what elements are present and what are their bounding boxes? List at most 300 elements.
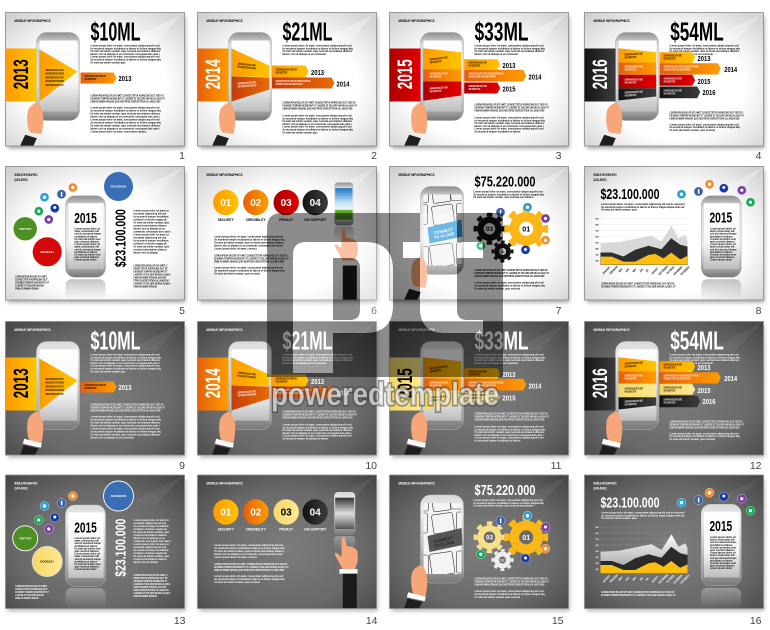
intro text: do eiusmod tempor incididunt ut labore et dolore magna aliq: [90, 368, 161, 370]
left bold text: LABORE ET DOLORE MAGNA: [15, 594, 44, 597]
area chart: 400: [596, 248, 599, 250]
phone text: sed do eiusmod tempo: [710, 541, 737, 544]
panel: slide 7: [390, 166, 570, 317]
body text: Lorem ipsum dolor sit amet, consectetur adipisc: [90, 130, 147, 134]
circle 02 credibility: [243, 499, 268, 532]
funnel segments: AND CONSECTETUR ADIPISCING: [238, 84, 257, 89]
intro text: do eiusmod tempor incididunt ut labore et dolore magna aliq: [90, 356, 161, 359]
right bold text: LABORE ET DOLORE MAGNA ALIQUA: [134, 273, 171, 277]
body text: Lorem ipsum dolor sit amet, consectetur adipiscing elit sed: [474, 282, 544, 284]
bold text: ENIM AD MINIM VENIAM, QUIS NOSTRUD EXERCITATION ULLAMCO NISI: [282, 416, 353, 419]
intro text: Ut enim ad minim veniam, quis: [601, 209, 638, 212]
amount heading: $21ML: [282, 16, 333, 46]
gear 03: 03: [486, 535, 493, 542]
amount heading: $10ML: [90, 326, 141, 356]
intro text: Ut enim ad minim veniam, quis nostrud exercitation ullamco: [282, 50, 353, 53]
arrow 2014: LOREM IPSUM DOLOR SIT AMET AND CONSECTETUR DOLOR: [664, 65, 699, 69]
body text: laboris nisi ut aliquip ex ea commodo consequat duis aute i: [474, 125, 544, 128]
right column text: do eiusmod tempor incididunt: [134, 216, 169, 218]
phone with reflection: [701, 504, 741, 608]
intro text: Ut enim ad minim veniam, quis nostrud exercitation ullamco: [90, 50, 161, 53]
phone text: incididunt ut labore: [74, 545, 98, 548]
slide heading: (DATA-DRIVE): [14, 178, 27, 182]
funnel segments: LOREM IPSUM DOLOR SIT AMET: [624, 78, 643, 82]
arrow 2013: [272, 374, 324, 386]
bold text: LOREM IPSUM DOLOR SIT AMET, CONSECTETUR ADIPISCING ELIT SED DO: [474, 103, 548, 107]
facebook bubble: [104, 481, 134, 511]
phone text: incididunt ut labore: [710, 235, 733, 238]
body text: Ut enim ad minim veniam, quis nostrud exercitation ullamco: [282, 120, 353, 123]
area chart: MAR: [618, 268, 624, 273]
year band: [6, 48, 39, 102]
intro text: Lorem ipsum dolor sit amet, consectetur adipiscing elit sed: [474, 190, 543, 194]
body text: Ut enim ad minim veniam, quis nostrud exercitation ullamco: [90, 422, 161, 424]
twitter bubble: TWITTER: [19, 536, 31, 540]
right column text: ut labore et dolore magna ali: [134, 242, 167, 246]
panel: slide 13: [6, 475, 186, 627]
circle 02 credibility: CREDIBILITY: [246, 528, 267, 532]
social icons: [476, 203, 550, 254]
body text: Ut enim ad minim veniam, quis nostrud exercitation ullamco: [474, 431, 545, 434]
intro text: laboris nisi ut aliquip ex ea commodo consequat duis aute i: [214, 244, 284, 248]
funnel segments: LOREM IPSUM DOLOR SIT AMET: [430, 72, 448, 76]
intro text: Ut enim ad minim veniam, quis nostrud exercitation: [474, 505, 534, 508]
phone text: Lorem ipsum dolor: [74, 259, 97, 262]
right column text: nostrud exercitation ullamco: [134, 224, 167, 228]
area chart: JANUARY: [602, 266, 611, 275]
arrow 2013: AND CONSECTETUR: [468, 64, 480, 68]
bold text: LOREM IPSUM DOLOR SIT AMET, CONSECTETUR ADIPISCING ELIT SED DO: [474, 577, 548, 581]
funnel segments: AND CONSECTETUR ADIPISCING: [238, 393, 257, 398]
right bold text: ENIM AD MINIM VENIAM: [134, 285, 157, 289]
hand holding phone: [212, 102, 235, 146]
intro text: Lorem ipsum dolor sit amet, consectetur adipiscing elit sed: [282, 44, 352, 48]
body text: Lorem ipsum dolor sit amet, consectetur adipiscing elit sed: [90, 106, 160, 110]
arrow 2015: [660, 384, 711, 395]
body text: Ut enim ad minim veniam, quis nostrud exercitation ullamco: [474, 122, 545, 125]
bold text: LOREM IPSUM DOLOR SIT AMET, CONSECTETUR ADIPISCING ELIT SED DO: [90, 94, 164, 98]
area chart: JANUARY: [602, 574, 611, 584]
body text: do eiusmod tempor incididunt ut labore et dolore magna aliq: [282, 426, 353, 429]
phone text: amet consectetur elit: [74, 540, 99, 543]
funnel segments: [232, 48, 269, 102]
intro text: Lorem ipsum dolor sit amet, consectetur adipiscing elit sed: [670, 354, 739, 356]
slide number: 7: [556, 305, 562, 317]
right bold text: STRUD EXERCITATION ULLAMCO NI: [134, 589, 169, 592]
intro text: do eiusmod tempor incididunt ut labore et dolore magna aliq: [670, 47, 740, 50]
funnel segments: LOREM IPSUM DOLOR SIT AMET: [624, 374, 643, 378]
arrow 2014: [464, 70, 542, 82]
slide heading: (DATA-DRIVE): [594, 486, 606, 490]
intro text: laboris nisi ut aliquip ex ea commodo consequat duis aute i: [214, 553, 284, 556]
phone text: Lorem ipsum dolor sit: [74, 228, 100, 230]
year band: 2015: [394, 368, 417, 398]
circle 04 support: 04: [310, 198, 321, 209]
intro text: do eiusmod tempor incididunt ut labore et dolore magna aliqua enim ad: [601, 514, 685, 517]
funnel segments: AND CONSECTETUR: [624, 68, 636, 72]
bold text: ENIM AD MINIM VENIAM, QUIS NOSTRUD EXERCITATION ULLAMCO NISI: [474, 109, 545, 112]
slide number: 11: [551, 460, 562, 472]
body text: Lorem ipsum dolor sit amet, consectetur adipiscing elit sed: [90, 416, 160, 418]
phone text: quis nostrud ullamco: [74, 550, 100, 553]
right bold text: LABORE ET DOLORE MAGNA ALIQUA: [134, 282, 171, 286]
right column text: nsectetur adipiscing elit sed: [134, 522, 167, 525]
area chart: JUN: [639, 268, 644, 273]
left bold text: ENIM AD MINIM VENIAM: [15, 287, 38, 291]
intro text: do eiusmod tempor incididunt ut labore et dolore magna aliq: [90, 47, 161, 50]
funnel segment: LOREM IPSUM DOLOR SIT AMET: [45, 385, 64, 389]
connect to cloud key: TO CLOUD: [433, 539, 455, 549]
phone text: sed do eiusmod tempo: [74, 542, 102, 545]
right column text: nostrud exercitation ullamco: [134, 248, 167, 252]
funnel segments: LOREM IPSUM DOLOR SIT AMET: [624, 387, 643, 391]
intro text: Ut enim ad minim veniam, quis nostrud exercitation ullamco: [670, 50, 740, 53]
body text: do eiusmod tempor incididunt ut labore: [474, 440, 521, 442]
year band: [390, 48, 423, 102]
area chart: DECEMBER: [680, 574, 691, 585]
right bold text: LABORE ET DOLORE MAGNA ALIQUA: [134, 583, 171, 586]
left bold text: CONSECTETUR ADIPISCING ELIT: [15, 278, 48, 282]
body text: do eiusmod tempor incididunt ut labore et dolore magna aliq: [282, 128, 353, 132]
circle 04 support: 04: [310, 508, 321, 518]
slide heading: MOBILE INFOGRAPHICS: [206, 173, 242, 177]
phone text: Lorem ipsum dolor sit: [74, 537, 100, 540]
left bold text: LOREM IPSUM DOLOR SIT AMET,: [15, 585, 48, 588]
arrow 2013: LOREM IPSUM DOLOR SIT AMET AND: [276, 68, 297, 72]
body text: Lorem ipsum dolor sit amet, consectetur adipiscing elit sed: [282, 435, 352, 438]
right column text: ut labore et dolore magna ali: [134, 528, 167, 531]
phone text: amet consectetur elit: [74, 230, 99, 233]
area chart: 900: [596, 527, 599, 529]
phone text: Lorem ipsum dolor sit: [710, 243, 736, 246]
intro text: Ut enim ad minim veniam, quis nostrud exercitation ullamco: [282, 359, 353, 362]
small phone with grayscale landscape: [334, 492, 355, 550]
intro text: do eiusmod tempor incididunt ut labore et dolore magna aliq: [214, 547, 285, 550]
bold text: ENIM AD MINIM VENIAM, QUIS NOSTRUD EXERCITATION ULLAMCO NISI: [670, 426, 740, 429]
right column text: Ut enim ad minim veniam, quis: [134, 531, 170, 534]
phone text: Ut enim ad minim veni: [74, 254, 101, 256]
phone text: amet consectetur elit: [74, 555, 99, 558]
area chart: 300: [596, 563, 599, 565]
right column text: nsectetur adipiscing elit sed: [134, 546, 167, 549]
circle 01 security: [213, 499, 238, 532]
arrow 2014: [660, 63, 738, 74]
body text: Ut enim ad minim veniam, quis nostrud: [670, 438, 716, 441]
slide heading: MOBILE INFOGRAPHICS: [398, 328, 434, 332]
arrow 2016: LOREM IPSUM DOLOR SIT AMET: [664, 398, 682, 402]
panel: slide 6: [198, 166, 378, 317]
intro text: laboris nisi ut aliquip ex ea commodo: [474, 53, 518, 56]
hand with cuff: [20, 412, 43, 455]
intro text: Lorem ipsum dolor sit amet, consectetur adipiscing elit sed: [90, 44, 160, 48]
social icons: [476, 511, 550, 563]
arrow 2013: [660, 52, 710, 63]
right bold text: ONSECTETUR ADIPISCING ELIT SE: [134, 267, 168, 271]
arrow 2013: AND CONSECTETUR: [468, 373, 480, 377]
hand with cuff: [404, 412, 427, 455]
intro text: Lorem ipsum dolor sit amet, consectetur adipiscing elit sed: [214, 236, 284, 238]
slide number: 9: [179, 460, 185, 472]
phone text: amet consectetur elit: [710, 539, 735, 542]
phone text: amet consectetur elit: [710, 230, 735, 233]
arrow 2016: 2016: [702, 397, 716, 406]
arrow 2016: LOREM IPSUM DOLOR SIT AMET: [664, 89, 682, 93]
right column text: laboris nisi ut aliquip ex ea: [134, 537, 165, 540]
social icons: [34, 492, 77, 534]
phone text: amet consectetur elit: [74, 246, 99, 249]
arrow 2013: 2013: [118, 383, 132, 392]
intro text: do eiusmod tempor incididunt ut labore et dolore magna aliq: [214, 238, 285, 242]
arrow 2014: 2014: [528, 72, 542, 82]
arrow 2015: 2015: [502, 394, 516, 402]
bold text: LOREM IPSUM DOLOR SIT AMET, CONSECTETUR ADIPISCING ELIT SED DO: [670, 111, 743, 115]
bold text: EIUSMOD TEMPOR INCIDIDUNT UT LABORE ET DOLORE MAGNA ALIQUA UT: [282, 104, 357, 108]
funnel segment: AND CONSECTETUR ADIPISCING: [45, 381, 64, 385]
body text: laboris nisi ut aliquip ex ea commodo consequat duis aute i: [282, 123, 352, 126]
arrow 2014: LOREM IPSUM DOLOR SIT AMET AND CONSECTETUR DOLOR: [276, 79, 311, 83]
body text: Ut enim ad minim veniam, quis nostrud: [474, 288, 521, 290]
body text: Lorem ipsum dolor sit amet, consectetur adipiscing elit sed: [282, 126, 352, 129]
funnel segments: AND CONSECTETUR: [625, 55, 637, 60]
phone text: amet consectetur elit: [710, 554, 735, 557]
bold text: EIUSMOD TEMPOR INCIDIDUNT UT LABORE ET DOLORE MAGNA ALIQUA UT: [282, 413, 357, 417]
year band: [6, 358, 39, 410]
body text: do eiusmod tempor incididunt ut labore et dolore magna aliq: [90, 110, 161, 112]
phone text: incididunt ut labore: [710, 544, 733, 547]
body text: do eiusmod tempor incididunt ut labore et dolore magna aliq: [670, 126, 740, 129]
arrow 2013: [272, 66, 324, 78]
arrow 2016: 2016: [702, 88, 716, 97]
twitter bubble: TWITTER: [19, 227, 31, 231]
intro text: Ut enim ad minim veniam, quis: [601, 517, 638, 520]
gear 03: [473, 212, 506, 245]
connect to cloud key: CONNECT: [433, 535, 454, 544]
year band: [584, 358, 618, 410]
funnel segments: LOREM IPSUM DOLOR SIT AMET: [624, 399, 643, 404]
body text: Ut enim ad minim veniam quis: [282, 131, 318, 134]
slide heading: MOBILE INFOGRAPHICS: [206, 482, 242, 486]
amount heading: $75.220.000: [474, 174, 536, 190]
right column text: Lorem ipsum dolor sit amet co: [134, 543, 169, 546]
phone text: Ut enim ad minim veni: [710, 238, 736, 241]
right column text: commodo consequat duis aute i: [134, 230, 171, 234]
twitter bubble: [14, 217, 37, 240]
bold text: EIUSMOD TEMPOR INCIDIDUNT UT LABORE ET DOLORE MAGNA ALIQUA UT: [670, 423, 744, 427]
phone text: sed do eiusmod tempo: [710, 557, 737, 560]
slide heading: MOBILE INFOGRAPHICS: [594, 328, 630, 332]
area chart: MAY: [632, 576, 638, 582]
phone text: incididunt ut labore: [74, 560, 98, 563]
body text: do eiusmod tempor incididunt ut labore et dolore magna aliq: [90, 122, 161, 124]
circle 03 privacy: PRIVACY: [279, 218, 294, 222]
bold text: EIUSMOD TEMPOR INCIDIDUNT UT LABORE ET DOLORE MAGNA ALIQUA UT: [474, 415, 549, 419]
facebook bubble: [104, 172, 133, 201]
area chart: FEBRUARY: [609, 265, 619, 275]
body text: do eiusmod tempor incididunt ut labore et dolore magna aliq: [474, 593, 545, 596]
area chart: 800: [596, 224, 599, 226]
arrow 2013: AND CONSECTETUR: [276, 380, 287, 384]
bold text: LOREM IPSUM DOLOR SIT AMET, CONSECTETUR ADIPISCING ELIT SED DO: [474, 412, 548, 416]
bold text: ENIM AD MINIM VENIAM, QUIS NOSTRUD EXERCITATION ULLAMCO NISI: [474, 275, 545, 278]
intro text: Lorem ipsum dolor sit amet, consect: [214, 248, 257, 250]
arrow 2014: [272, 386, 350, 398]
year band: 2016: [589, 368, 612, 398]
connect to cloud key: [428, 220, 462, 244]
amount heading: $21ML: [282, 326, 333, 356]
area chart: OCTOBER: [666, 574, 676, 584]
bold text: LOREM IPSUM DOLOR SIT AMET, CONSECTETUR ADIPISCING ELIT SED DO: [601, 591, 674, 594]
body text: do eiusmod tempor incididunt ut labore et dolore magna aliq: [474, 119, 545, 122]
bold text: LOREM IPSUM DOLOR SIT AMET, CONSECTETUR ADIPISCING ELIT SED DO: [670, 420, 743, 424]
amount heading: $23.100.000: [600, 495, 660, 512]
small phone with landscape: [334, 182, 354, 242]
funnel segments: LOREM IPSUM DOLOR SIT AMET: [237, 371, 257, 377]
body text: Lorem ipsum dolor sit amet, consectetur adipiscing elit sed: [474, 128, 544, 131]
bold text: LOREM IPSUM DOLOR SIT AMET, CONSECTETUR ADIPISCING ELIT SED DO: [474, 269, 548, 272]
right column text: laboris nisi ut aliquip ex ea: [134, 228, 165, 230]
bold text: EIUSMOD TEMPOR INCIDIDUNT UT LABORE ET DOLORE MAGNA ALIQUA UT: [90, 406, 165, 410]
arrow 2013: 2013: [118, 74, 132, 83]
bold text: ENIM AD MINIM VENIAM, QUIS NOSTRUD EXERCITATION ULLAMCO NISI: [670, 117, 740, 120]
area chart: JUN: [639, 576, 644, 582]
twitter bubble: [13, 526, 38, 551]
area chart: 800: [596, 533, 599, 535]
bold text: EIUSMOD TEMPOR INCIDIDUNT UT LABORE ET DOLORE MAGNA ALIQUA UT: [474, 272, 549, 275]
circle 01 security: SECURITY: [218, 218, 235, 222]
body text: Lorem ipsum dolor sit amet, consectetur adipiscing elit sed: [474, 437, 544, 440]
phone: [228, 32, 272, 120]
body text: do eiusmod tempor incididunt ut labore: [282, 438, 329, 440]
slide number: 8: [756, 305, 762, 317]
arrow 2015: [464, 392, 516, 402]
funnel segments: AND CONSECTETUR: [430, 89, 442, 94]
arrow 2013: LOREM IPSUM DOLOR SIT AMET AND: [84, 74, 106, 78]
funnel segments: LOREM IPSUM DOLOR SIT AMET: [237, 390, 256, 395]
arrow 2014: ADIPISCING SIT AMET AND CONSECTETUR ELIT: [664, 68, 691, 72]
intro text: do eiusmod tempor incididunt ut labore et dolore magna aliq: [282, 47, 353, 50]
panel: slide 9: [6, 322, 186, 472]
right column text: nostrud exercitation ullamco: [134, 558, 167, 561]
amount heading: $75.220.000: [474, 482, 536, 499]
panel: slide 16: [584, 475, 764, 627]
slide number: 2: [371, 150, 377, 162]
google plus bubble: [32, 546, 62, 576]
social icons: [34, 183, 77, 224]
right column text: ut labore et dolore magna ali: [134, 218, 167, 222]
arrow 2013: [660, 361, 710, 372]
funnel segments: AND CONSECTETUR ADIPISCING: [237, 374, 256, 380]
arrow 2013: AND CONSECTETUR: [84, 77, 96, 81]
slide heading: MOBILE INFOGRAPHICS: [206, 328, 242, 332]
arrow 2015: [660, 75, 711, 86]
arrow 2014: LOREM IPSUM DOLOR SIT AMET AND CONSECTETUR DOLOR: [468, 381, 504, 385]
funnel segments: AND CONSECTETUR: [430, 75, 441, 79]
arrow 2015: LOREM IPSUM DOLOR SIT AMET: [468, 84, 487, 88]
funnel segments: [618, 357, 656, 410]
gear 02: [491, 549, 514, 571]
body text: Lorem ipsum dolor sit amet, consectetur adipiscing elit sed: [670, 432, 739, 436]
phone text: incididunt ut labore: [710, 559, 733, 562]
gear 01: 01: [522, 226, 530, 233]
phone text: quis nostrud ullamco: [710, 549, 735, 552]
funnel segments: AND CONSECTETUR: [430, 398, 442, 403]
bold text: LOREM IPSUM DOLOR SIT AMET, CONSECTETUR ADIPISCING ELIT SED DO: [214, 563, 287, 566]
arrow 2014: ADIPISCING SIT AMET AND CONSECTETUR ELIT: [468, 75, 496, 79]
phone with keyboard: [414, 493, 466, 583]
arrow 2014: LOREM IPSUM DOLOR SIT AMET AND CONSECTETUR DOLOR: [664, 374, 699, 378]
funnel segment: LOREM IPSUM DOLOR SIT AMET: [45, 76, 64, 80]
right column text: laboris nisi ut aliquip: [134, 252, 158, 254]
arrow 2015: AND CONSECTETUR: [664, 389, 675, 393]
intro text: laboris nisi ut aliquip ex ea commodo consequat duis aute i: [90, 362, 160, 365]
circle 02 credibility: CREDIBILITY: [246, 218, 267, 222]
body text: Lorem ipsum dolor sit amet, consectetur adipiscing elit sed: [90, 118, 160, 122]
phone text: Lorem ipsum dolor sit: [710, 228, 736, 230]
intro text: Ut enim ad minim veniam quis: [90, 61, 126, 64]
phone text: sed do eiusmod tempo: [74, 558, 102, 561]
right column text: Ut enim ad minim veniam, quis: [134, 246, 170, 248]
panel: slide 1: [6, 12, 186, 162]
bold text: EIUSMOD TEMPOR INCIDIDUNT UT LABORE ET DOLORE MAGNA ALIQUA UT: [670, 114, 744, 118]
gear 01: [504, 515, 549, 560]
year band: 2014: [202, 368, 225, 398]
slide number: 3: [556, 150, 562, 162]
area chart: AUGUST: [651, 575, 660, 584]
area chart: NOVEMBER: [673, 266, 684, 276]
phone text: Ut enim ad minim veni: [710, 546, 736, 549]
body text: Lorem ipsum dolor sit amet, consectetur adipiscing elit sed: [282, 114, 352, 118]
arrow 2014: [660, 372, 738, 384]
area chart: 500: [596, 551, 599, 553]
circle 04 support: [302, 499, 328, 532]
funnel segments: [618, 48, 656, 100]
hand holding phone: [404, 102, 427, 146]
amount heading: $54ML: [670, 16, 724, 46]
funnel segments: AND CONSECTETUR: [430, 384, 441, 388]
intro text: Lorem ipsum dolor sit amet, consectetur adipiscing elit sed do eiusmod: [601, 512, 685, 514]
intro text: Ut enim ad minim veniam, quis nostrud exercitation ullamco: [214, 550, 284, 553]
right column text: do eiusmod tempor incididunt: [134, 549, 169, 552]
panel: slide 10: [198, 322, 378, 472]
connect to cloud key: CONNECT: [433, 226, 454, 236]
phone text: Lorem ipsum dolor sit: [74, 243, 100, 246]
body text: laboris nisi ut aliquip ex ea commodo consequat duis aute i: [90, 128, 160, 130]
intro text: Lorem ipsum dolor sit amet, consectetur adipiscing elit sed: [90, 365, 160, 368]
funnel segment: LOREM IPSUM DOLOR SIT AMET: [45, 68, 64, 72]
arrow 2015: LOREM IPSUM DOLOR SIT AMET: [664, 386, 682, 390]
arrow 2014: 2014: [528, 382, 542, 390]
intro text: Lorem ipsum dolor sit amet, consectetur adipiscing elit sed: [474, 354, 544, 356]
circle 02 credibility: 02: [250, 198, 262, 209]
arrow 2014: ADIPISCING SIT AMET AND CONSECTETUR ELIT: [664, 377, 691, 381]
area chart: SEPTEMBER: [658, 573, 669, 585]
body text: Ut enim ad minim veniam, quis nostrud: [474, 596, 521, 599]
year in phone: 2015: [74, 210, 97, 227]
funnel segments: LOREM IPSUM DOLOR SIT AMET: [624, 52, 643, 57]
slide number: 4: [756, 150, 762, 162]
phone text: quis nostrud ullamco: [710, 565, 735, 568]
right column text: nsectetur adipiscing elit sed: [134, 236, 167, 240]
arrow 2013: 2013: [698, 54, 710, 63]
body text: do eiusmod tempor incididunt ut labore et dolore magna aliq: [214, 270, 285, 272]
hand holding phone: [20, 102, 43, 146]
slide number: 13: [174, 615, 186, 627]
area chart: 300: [596, 254, 599, 256]
pointing hand: [335, 228, 358, 300]
slide number: 1: [179, 150, 185, 162]
intro text: Lorem ipsum dolor sit amet, consectetur adipiscing elit sed: [90, 354, 160, 356]
area chart: 600: [596, 236, 599, 238]
